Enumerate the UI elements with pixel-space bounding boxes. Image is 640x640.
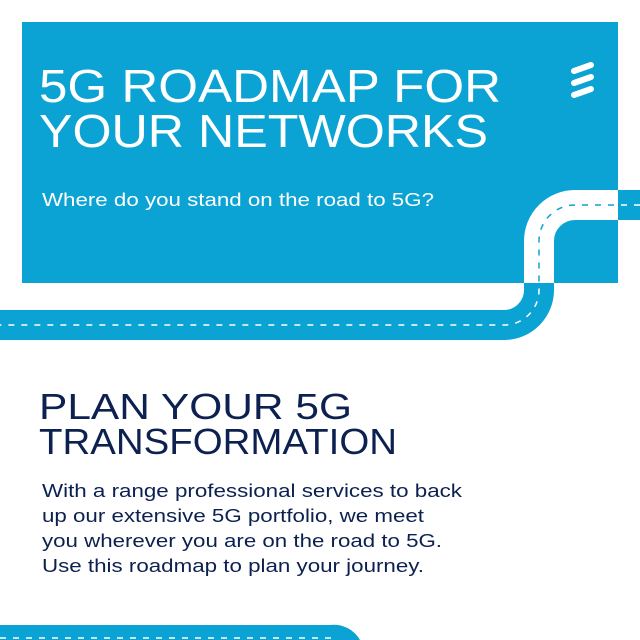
heading: PLAN YOUR 5G	[39, 386, 352, 427]
body text	[42, 480, 463, 576]
body text: up our extensive 5G portfolio, we meet	[42, 505, 424, 526]
title	[39, 60, 501, 157]
road: bottom road segment	[0, 625, 360, 640]
heading	[39, 386, 397, 462]
body text: Use this roadmap to plan your journey.	[42, 555, 424, 576]
icon: logo	[574, 65, 591, 95]
body text: you wherever you are on the road to 5G.	[42, 530, 442, 551]
title: 5G ROADMAP FOR	[39, 60, 501, 112]
heading: TRANSFORMATION	[39, 421, 397, 462]
body text: With a range professional services to back	[42, 480, 463, 501]
road: winding road	[0, 205, 640, 325]
subtitle: Where do you stand on the road to 5G?	[42, 189, 434, 210]
panel: header blue block	[22, 22, 618, 283]
title: YOUR NETWORKS	[39, 105, 488, 157]
